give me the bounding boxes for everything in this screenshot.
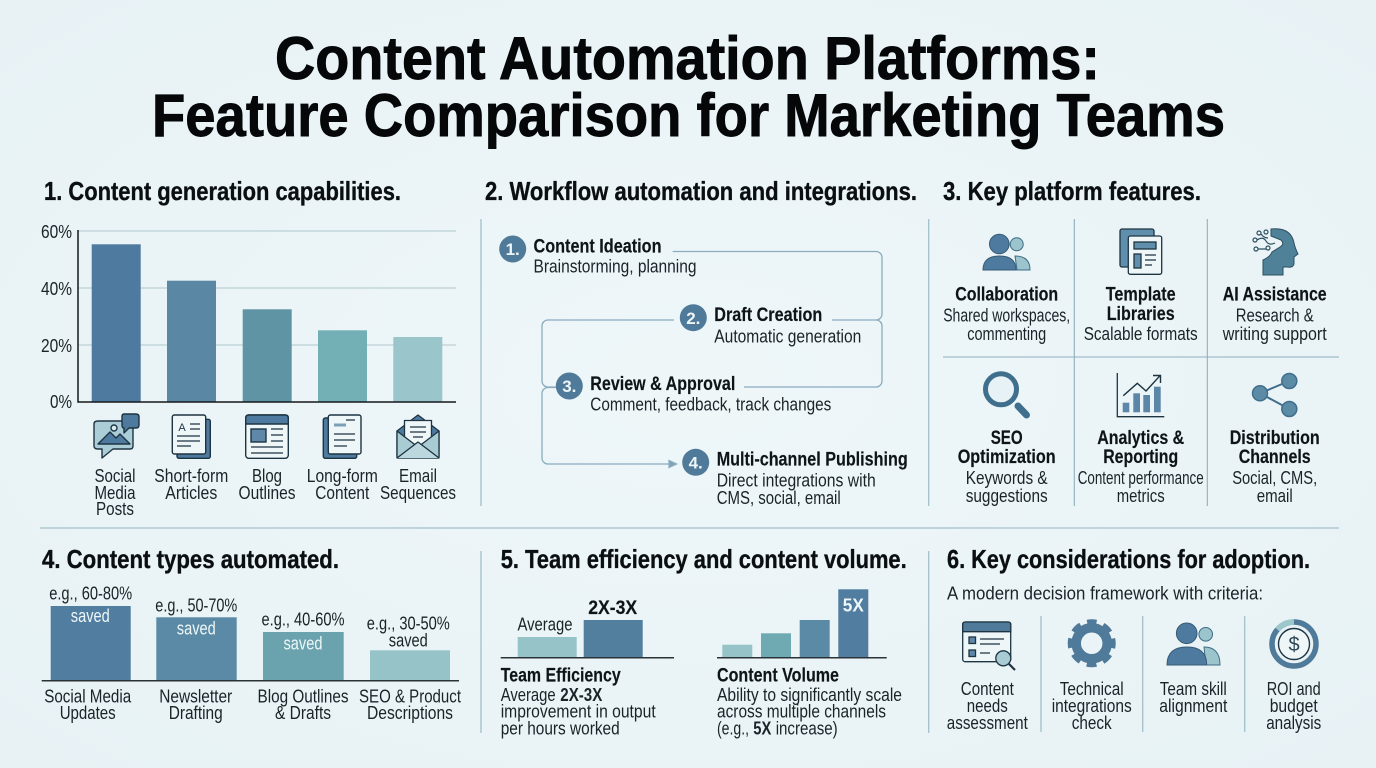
criterion: team skill alignment <box>1159 623 1227 716</box>
heading 1: 1. Content generation capabilities. <box>44 176 401 206</box>
heading 3: 3. Key platform features. <box>943 176 1201 206</box>
category labels: Articles <box>165 483 217 503</box>
bar chart: time saved: e.g., 30-50% <box>367 613 450 633</box>
feature: collaboration <box>943 234 1070 344</box>
feature: distribution channels: Social, CMS, <box>1232 468 1317 488</box>
step 4: multi-channel publishing: Direct integrations with <box>717 470 876 490</box>
step 4: multi-channel publishing: 4. <box>689 454 703 472</box>
feature: analytics and reporting: Content performance <box>1078 468 1204 488</box>
feature: seo optimization: SEO <box>991 428 1023 449</box>
criterion: technical integrations check: check <box>1072 713 1113 733</box>
text: content volume: increase) <box>776 719 838 739</box>
icon: long-form content <box>323 415 361 458</box>
feature: ai assistance: Research & <box>1236 306 1314 326</box>
feature: seo optimization: suggestions <box>966 486 1048 506</box>
category labels <box>94 466 456 519</box>
criterion: content needs assessment: Content <box>961 679 1014 699</box>
step 2: draft creation <box>680 304 861 346</box>
step 2: draft creation: 2. <box>686 309 700 328</box>
title <box>152 25 1225 149</box>
workflow connectors <box>542 252 882 468</box>
feature: template libraries: Libraries <box>1107 304 1175 325</box>
heading 4: 4. Content types automated. <box>42 544 339 574</box>
feature: analytics and reporting: Reporting <box>1103 447 1178 468</box>
step 1: content ideation: 1. <box>506 240 520 259</box>
criterion: roi and budget analysis <box>1266 622 1321 733</box>
feature: ai assistance: writing support <box>1222 324 1327 344</box>
text: team efficiency: improvement in output <box>501 702 656 722</box>
bar chart: time saved: saved <box>389 631 428 651</box>
text: team efficiency: Team Efficiency <box>501 666 621 687</box>
panel: workflow automation and integrations <box>485 176 917 508</box>
step 3: review and approval: 3. <box>562 377 576 396</box>
step 4: multi-channel publishing: CMS, social, email <box>717 488 841 508</box>
category labels: Short-form <box>154 466 228 486</box>
text: team efficiency <box>501 666 656 739</box>
feature: ai assistance: AI Assistance <box>1223 285 1327 306</box>
panel: team efficiency and content volume <box>501 544 907 739</box>
icon: blog outlines <box>246 415 288 458</box>
criterion: technical integrations check: Technical <box>1060 679 1124 699</box>
text: team efficiency: Average <box>501 685 556 705</box>
chart: content volume <box>717 589 887 658</box>
bar chart: time saved: saved <box>284 633 322 653</box>
panel: content types automated <box>42 544 461 723</box>
panel: content generation capabilities <box>41 176 456 519</box>
bar chart: time saved: e.g., 50-70% <box>155 596 237 616</box>
step 2: draft creation: Automatic generation <box>714 326 861 346</box>
criterion: content needs assessment: needs <box>967 696 1008 716</box>
step 3: review and approval: Review & Approval <box>590 374 735 395</box>
bar chart: time saved: saved <box>71 606 110 626</box>
feature: template libraries: Template <box>1106 285 1176 306</box>
title: Content Automation Platforms: <box>275 25 1100 92</box>
category labels: Media <box>94 483 136 503</box>
bar chart: time saved: saved <box>177 619 216 639</box>
step 2: draft creation: Draft Creation <box>714 305 822 326</box>
bar chart: content generation: 60% <box>41 222 72 242</box>
criterion: content needs assessment <box>947 622 1028 733</box>
category labels: Email <box>399 466 437 486</box>
category labels: Sequences <box>380 483 456 503</box>
heading 6: 6. Key considerations for adoption. <box>947 544 1310 574</box>
chart: team efficiency: Average <box>518 615 572 635</box>
criterion: roi and budget analysis: $ <box>1288 634 1300 656</box>
step 3: review and approval <box>556 372 831 415</box>
feature: analytics and reporting: Analytics & <box>1097 428 1184 449</box>
bar chart: content generation <box>41 222 456 412</box>
criterion: roi and budget analysis: ROI and <box>1267 679 1321 699</box>
step 1: content ideation <box>499 236 696 277</box>
panel: key considerations for adoption <box>947 544 1321 733</box>
content type labels: Updates <box>60 703 116 723</box>
icon: email sequences <box>397 415 439 458</box>
bar chart: time saved <box>42 583 459 681</box>
content type labels: Blog Outlines <box>258 687 348 707</box>
text: team efficiency: 2X-3X <box>560 685 602 705</box>
content type labels: & Drafts <box>275 703 331 723</box>
step 4: multi-channel publishing <box>682 449 908 508</box>
feature: collaboration: Collaboration <box>955 285 1058 306</box>
category labels: Outlines <box>238 483 296 503</box>
category labels: Social <box>94 466 136 486</box>
text: content volume: across multiple channels <box>717 702 886 722</box>
heading 2: 2. Workflow automation and integrations. <box>485 176 917 206</box>
content type labels: SEO & Product <box>359 687 461 707</box>
feature: template libraries: Scalable formats <box>1084 324 1198 344</box>
feature: ai assistance <box>1222 229 1327 344</box>
feature: collaboration: Shared workspaces, <box>943 306 1070 326</box>
text: team efficiency: per hours worked <box>501 719 620 739</box>
feature: distribution channels <box>1230 374 1320 506</box>
bar chart: time saved: e.g., 60-80% <box>49 583 132 603</box>
bar chart: content generation: 40% <box>41 279 72 299</box>
criterion: content needs assessment: assessment <box>947 713 1028 733</box>
heading 5: 5. Team efficiency and content volume. <box>501 544 907 574</box>
icon: short-form articles <box>172 415 210 458</box>
step 3: review and approval: Comment, feedback, track changes <box>590 395 831 415</box>
category labels: Long-form <box>307 466 378 486</box>
criterion: technical integrations check <box>1052 622 1132 733</box>
text: content volume: (e.g., <box>717 719 749 739</box>
criterion: roi and budget analysis: budget <box>1270 696 1318 716</box>
bar chart: content generation: 20% <box>41 336 72 356</box>
feature: distribution channels: email <box>1257 486 1293 506</box>
step 1: content ideation: Content Ideation <box>534 236 662 257</box>
icon: social media posts <box>94 414 139 458</box>
chart: content volume: 5X <box>843 595 864 615</box>
content type labels: Social Media <box>44 687 132 707</box>
text: content volume <box>717 666 902 739</box>
criterion: team skill alignment: Team skill <box>1160 679 1227 699</box>
criterion: technical integrations check: integrations <box>1052 696 1132 716</box>
criterion: team skill alignment: alignment <box>1159 696 1227 716</box>
step 4: multi-channel publishing: Multi-channel Publishing <box>717 450 908 471</box>
category labels: Content <box>315 483 369 503</box>
text: content volume: Ability to significantly scale <box>717 685 902 705</box>
category labels: Blog <box>252 466 282 486</box>
text: content volume: Content Volume <box>717 666 839 687</box>
content type labels: Descriptions <box>367 703 453 723</box>
feature: seo optimization: Optimization <box>958 447 1056 468</box>
content type labels: Drafting <box>169 703 223 723</box>
category labels: Posts <box>96 499 134 519</box>
chart: team efficiency: 2X-3X <box>588 598 637 619</box>
content type labels: Newsletter <box>159 687 232 707</box>
feature: analytics and reporting <box>1078 373 1204 506</box>
panel: key platform features <box>943 176 1327 506</box>
framework intro text: A modern decision framework with criteria: <box>947 583 1263 603</box>
step 1: content ideation: Brainstorming, planning <box>534 257 696 277</box>
feature: seo optimization: Keywords & <box>966 468 1048 488</box>
chart: team efficiency <box>501 598 674 658</box>
feature: template libraries <box>1084 229 1198 344</box>
feature: analytics and reporting: metrics <box>1117 486 1165 506</box>
icon: short-form articles: A <box>178 422 186 434</box>
feature: collaboration: commenting <box>967 324 1046 344</box>
feature: distribution channels: Distribution <box>1230 428 1320 449</box>
title: Feature Comparison for Marketing Teams <box>152 82 1225 149</box>
bar chart: content generation: 0% <box>50 392 72 412</box>
text: content volume: 5X <box>753 719 771 739</box>
content type labels <box>44 687 461 723</box>
feature: seo optimization <box>958 374 1056 506</box>
feature: distribution channels: Channels <box>1239 447 1311 468</box>
criterion: roi and budget analysis: analysis <box>1266 713 1321 733</box>
bar chart: time saved: e.g., 40-60% <box>262 610 344 630</box>
